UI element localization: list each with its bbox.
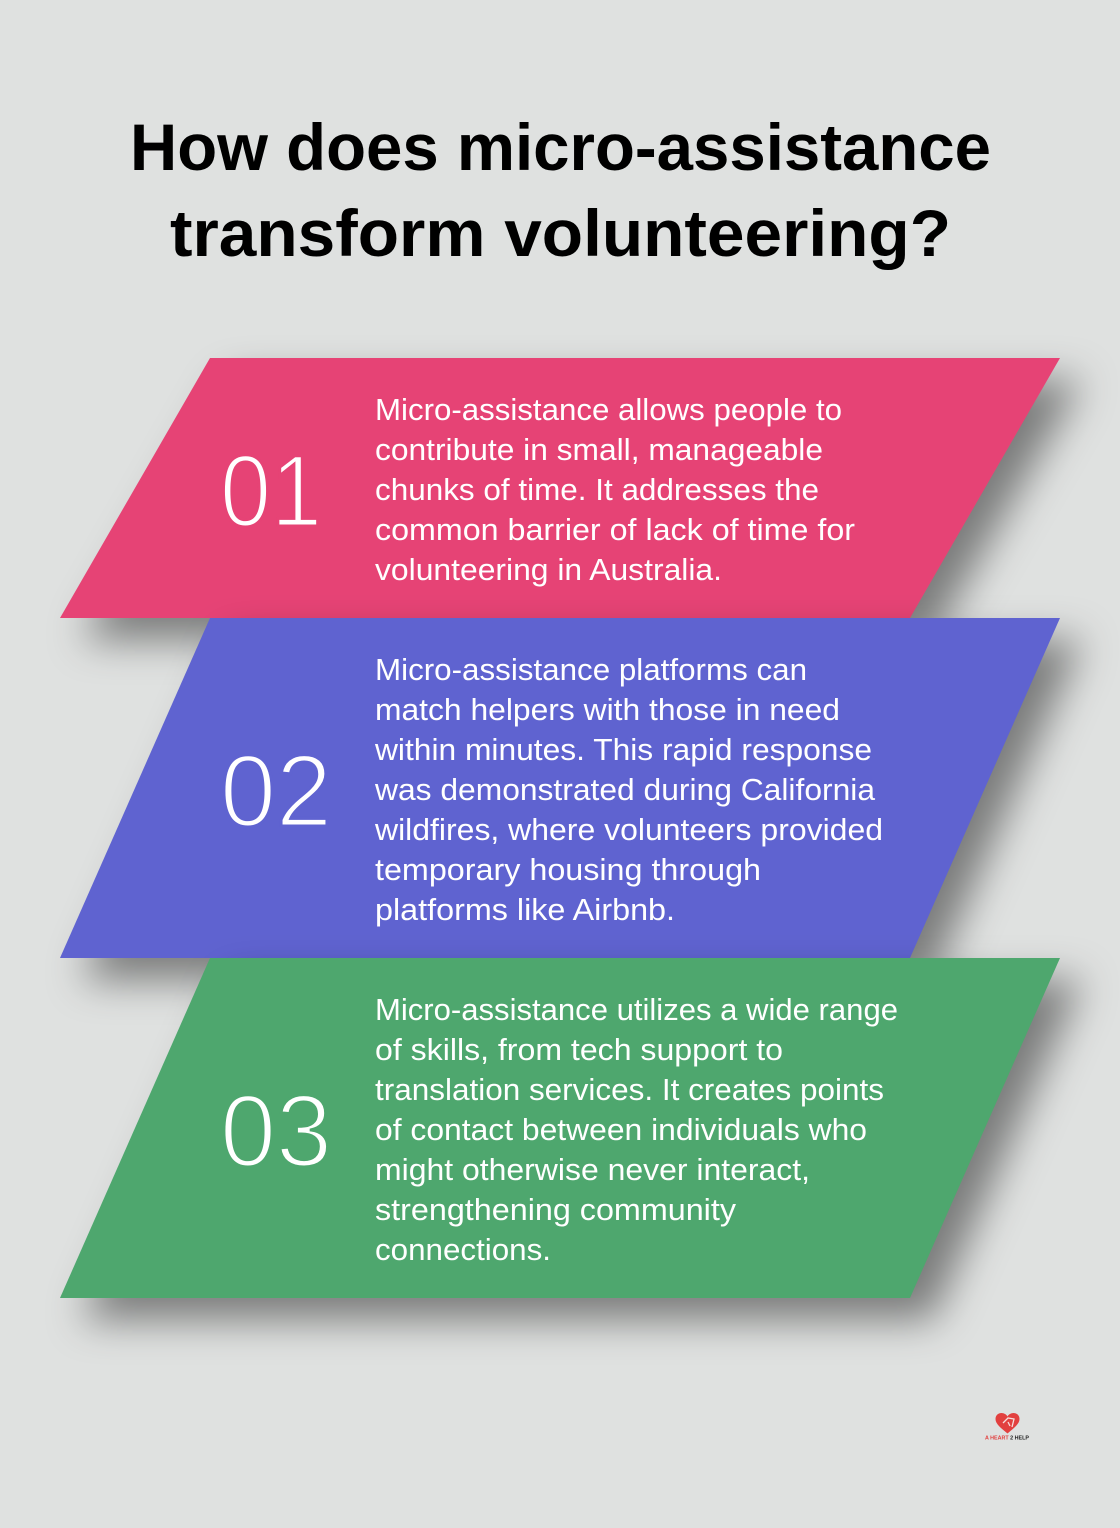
text block 03: of skills, from tech support to [375, 1033, 783, 1067]
icon: hands [1003, 1418, 1014, 1427]
text block 01: chunks of time. It addresses the [375, 473, 819, 507]
parallelogram: blue [60, 618, 1060, 958]
text block 03: might otherwise never interact, [375, 1153, 810, 1187]
text block 03: translation services. It creates points [375, 1073, 884, 1107]
text block 03: of contact between individuals who [375, 1113, 867, 1147]
logo wordmark: A HEART 2 HELP [985, 1436, 1029, 1442]
text block 02 [374, 653, 883, 927]
text block 01 [375, 393, 855, 587]
parallelogram: pink [60, 358, 1060, 618]
text block 02: Micro-assistance platforms can [375, 653, 807, 687]
text block 01: common barrier of lack of time for [375, 513, 855, 547]
title: How does micro-assistance [130, 110, 991, 184]
text block 03: Micro-assistance utilizes a wide range [375, 993, 898, 1027]
logo: A Heart 2 Help [985, 1413, 1029, 1442]
text block 02: match helpers with those in need [375, 693, 840, 727]
icon: heart [996, 1413, 1020, 1434]
text block 02: was demonstrated during California [374, 773, 875, 807]
panel: step 02 [60, 618, 1082, 980]
title: transform volunteering? [170, 196, 951, 270]
text block 03: strengthening community [375, 1193, 737, 1227]
panel: step 03 [60, 958, 1082, 1320]
text block 02: wildfires, where volunteers provided [374, 813, 883, 847]
text block 02: within minutes. This rapid response [374, 733, 872, 767]
parallelogram: green [60, 958, 1060, 1298]
title [130, 110, 991, 270]
number 03: 03 [220, 1074, 332, 1188]
text block 01: Micro-assistance allows people to [375, 393, 842, 427]
panel: step 01 [60, 358, 1082, 640]
text block 01: volunteering in Australia. [375, 553, 722, 587]
text block 02: platforms like Airbnb. [375, 893, 675, 927]
text block 01: contribute in small, manageable [375, 433, 823, 467]
text block 03 [375, 993, 898, 1267]
number 02: 02 [220, 734, 332, 848]
text block 02: temporary housing through [375, 853, 761, 887]
text block 03: connections. [375, 1233, 551, 1267]
number 01: 01 [220, 434, 322, 548]
